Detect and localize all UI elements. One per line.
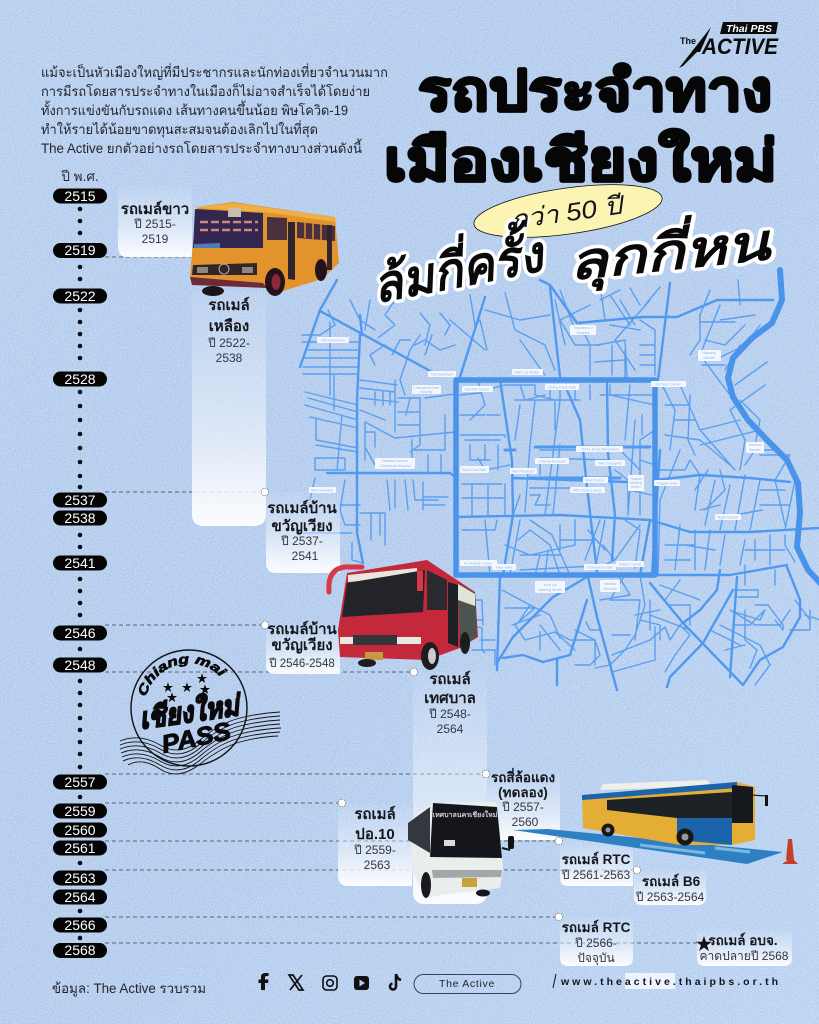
map: place labels: Wat Duangdee [598, 462, 622, 466]
timeline: 2538 [64, 510, 96, 526]
card: Por Or 10 bus: รถเมล์ [354, 805, 396, 823]
map: Ping river [728, 270, 819, 585]
card: Ban Khwan Wiang bus 2546: ปี 2546-2548 [268, 657, 335, 670]
card: experimental red songthaew [487, 767, 560, 840]
timeline: 2541 [64, 555, 96, 571]
card: Ban Khwan Wiang bus 2537: รถเมล์บ้าน [267, 499, 338, 517]
card: PAO bus: รถเมล์ อบจ. [708, 932, 778, 948]
map: place labels: Wat Suandok [311, 488, 333, 492]
map: place labels: Chiangmai Hospital [379, 464, 411, 468]
card: RTC bus 2566 [560, 917, 633, 966]
timeline: 2564 [64, 889, 96, 905]
icon: youtube [354, 976, 369, 990]
button: The Active: The Active [439, 978, 495, 990]
card: white bus: รถเมล์ขาว [121, 200, 189, 218]
map: place labels: Cultural Museum [538, 460, 566, 464]
intro paragraph: ทำให้รายได้น้อยขาดทุนสะสมจนต้องเลิกไปในที่สุด [41, 120, 318, 138]
intro paragraph: แม้จะเป็นหัวเมืองใหญ่ที่มีประชากรและนักท่องเที่ยวจำนวนมาก [41, 63, 388, 80]
timeline: 2528 [64, 371, 96, 387]
map: place labels: Wat Pantao [586, 478, 604, 482]
timeline: 2522 [64, 288, 96, 304]
map: place labels: Walking Street [538, 588, 562, 592]
timeline markers on dashes [261, 488, 641, 921]
icon: tiktok [390, 974, 401, 989]
stamp: Chiang Mai Pass [120, 649, 281, 774]
card: B6 bus [634, 870, 706, 905]
icon: X [289, 975, 303, 990]
callout text: over 50 years: กว่า 50 ปี [509, 191, 627, 235]
timeline: 2559 [64, 803, 96, 819]
timeline: 2546 [64, 625, 96, 641]
map: place labels: Hospital [420, 390, 433, 394]
card: municipal bus [413, 670, 487, 904]
timeline: 2557 [64, 774, 96, 790]
card: PAO bus [697, 930, 792, 966]
card: yellow bus [192, 290, 266, 526]
stamp: Chiang Mai Pass: ★ [166, 692, 178, 704]
timeline: 2560 [64, 822, 96, 838]
card: white bus: ปี 2515- [134, 217, 176, 231]
map: place labels: Kamsaenkam [431, 372, 453, 376]
map: place labels: Thapanpol 2 [573, 326, 593, 330]
icon: star marker: ★ [696, 935, 712, 954]
card: yellow bus: 2538 [216, 351, 243, 365]
map: place labels: Walking [630, 481, 642, 485]
card: Por Or 10 bus: 2563 [364, 858, 391, 872]
map: place labels: Market [750, 448, 760, 452]
card: Ban Khwan Wiang bus 2546: รถเมล์บ้าน [267, 620, 338, 638]
timeline [53, 169, 107, 958]
stamp: Chiang Mai Pass: PASS [159, 717, 234, 759]
map: place labels: Three Kings Monument [581, 448, 619, 452]
card: RTC bus 2566: ปี 2566- [575, 936, 617, 950]
year label: ปี พ.ศ. [61, 169, 99, 184]
map: place labels: Chiangmai Ram [413, 386, 439, 390]
card: Por Or 10 bus: ปอ.10 [355, 826, 395, 843]
card: municipal bus: 2564 [437, 722, 464, 736]
timeline: 2537 [64, 492, 96, 508]
map: place labels: Market [704, 356, 714, 360]
intro paragraph: การมีรถโดยสารประจำทางในเมืองก็ไม่อาจสำเร็จได้โดยง่าย [41, 82, 370, 99]
card: experimental red songthaew: 2560 [512, 815, 539, 829]
intro paragraph: ทั้งการแข่งขันกับรถแดง เส้นทางคนขึ้นน้อย พิษโควิด-19 [41, 100, 348, 118]
map: place labels: Hua Rin Corner [465, 388, 490, 392]
map: place labels: Warorot [749, 443, 761, 447]
logo: Thai PBS The Active: ACTIVE [701, 34, 779, 59]
icon: instagram [323, 976, 337, 990]
stamp: Chiang Mai Pass: เชียงใหม่ [137, 688, 244, 736]
icon: facebook [258, 973, 268, 990]
card: Ban Khwan Wiang bus 2546 [266, 620, 340, 674]
card: experimental red songthaew: ปี 2557- [502, 800, 544, 814]
map: place labels: Wat Lok Molee [515, 370, 539, 374]
timeline: 2515 [64, 188, 96, 204]
card: yellow bus: เหลือง [209, 318, 249, 335]
timeline: 2561 [64, 840, 96, 856]
title: เมืองเชียงใหม่ [384, 128, 777, 192]
source note: ข้อมูล: The Active รวบรวม [52, 981, 206, 997]
map: major roads [300, 280, 819, 575]
card: Ban Khwan Wiang bus 2537: 2541 [292, 549, 319, 563]
stamp: Chiang Mai Pass: ★ [196, 673, 208, 685]
map: minor roads [300, 300, 455, 563]
logo: Thai PBS The Active: The [680, 36, 696, 46]
title [384, 59, 777, 192]
timeline connector dashes [105, 257, 700, 943]
card: Ban Khwan Wiang bus 2546: ขวัญเวียง [271, 637, 333, 654]
callout: over 50 years ellipse [471, 175, 665, 247]
map: place labels [309, 325, 764, 593]
map: place labels: Nimmanhemin [321, 338, 345, 342]
map: place labels: Street [631, 485, 641, 489]
card: PAO bus: คาดปลายปี 2568 [700, 949, 789, 963]
map: ring road around the old city [456, 380, 655, 575]
map: place labels: Wua Lai [543, 583, 557, 587]
title: รถประจำทาง [418, 59, 772, 122]
card: municipal bus: ปี 2548- [429, 707, 471, 721]
map: place labels: Wat Chedi Luang [573, 488, 601, 492]
card: yellow bus: ปี 2522- [208, 336, 250, 350]
timeline: 2548 [64, 657, 96, 673]
map: Chiang Mai road network [300, 270, 819, 690]
card: B6 bus: รถเมล์ B6 [642, 873, 701, 889]
card: RTC bus 2561 [560, 841, 633, 886]
card: Ban Khwan Wiang bus 2537: ขวัญเวียง [271, 518, 333, 535]
card: Por Or 10 bus: ปี 2559- [354, 843, 396, 857]
card: B6 bus: ปี 2563-2564 [635, 890, 704, 904]
map: place labels: Katam Corner [619, 562, 642, 566]
timeline: 2563 [64, 870, 96, 886]
timeline: 2566 [64, 917, 96, 933]
map: place labels: Si Phum Corner [655, 382, 682, 386]
stamp: Chiang Mai Pass: ★ [182, 682, 192, 694]
map: place labels: Hospital [604, 587, 617, 591]
card: experimental red songthaew: (ทดลอง) [498, 785, 548, 800]
timeline: 2568 [64, 942, 96, 958]
logo: Thai PBS The Active: Thai PBS [726, 23, 772, 35]
card: municipal bus: เทศบาล [424, 690, 476, 707]
card: RTC bus 2566: ปัจจุบัน [577, 951, 615, 966]
intro paragraph [41, 63, 388, 156]
stamp: Chiang Mai Pass: ★ [200, 684, 210, 696]
stamp: Chiang Mai Pass: Chiang mai [138, 656, 228, 696]
map: place labels: Suan Dok Gate [462, 468, 486, 472]
map: place labels: Thapae Gate [657, 482, 677, 486]
button: The Active [414, 974, 521, 994]
map: place labels: Maharaj Nakorn [382, 459, 408, 463]
map: place labels: Ku Huang Corner [464, 562, 493, 566]
handwritten subtitle: ลุกกี่หน [564, 206, 775, 294]
website url: www.theactive.thaipbs.or.th [560, 976, 778, 988]
timeline: 2519 [64, 242, 96, 258]
card: Ban Khwan Wiang bus 2537: ปี 2537- [281, 534, 323, 548]
map: place labels: Chiangmai Gate [587, 566, 613, 570]
map: place labels: Hospital [577, 331, 590, 335]
icon: white municipal minibus: เทศบาลนครเชียงใหม่ [433, 810, 498, 819]
card: experimental red songthaew: รถสี่ล้อแดง [491, 767, 555, 785]
card: Por Or 10 bus [338, 803, 412, 886]
card: RTC bus 2561: รถเมล์ RTC [562, 851, 631, 867]
map: place labels: Medfast [604, 582, 616, 586]
card: municipal bus: รถเมล์ [429, 670, 471, 688]
card: white bus: 2519 [142, 232, 169, 246]
stamp: Chiang Mai Pass: ★ [162, 682, 174, 694]
map: place labels: Thapae [630, 477, 642, 481]
icon: red Ban Khwan Wiang minibus [329, 560, 478, 670]
handwritten subtitle [366, 206, 775, 314]
intro paragraph: The Active ยกตัวอย่างรถโดยสารประจำทางบางส่วนดังนี้ [41, 138, 363, 156]
card: RTC bus 2566: รถเมล์ RTC [562, 919, 631, 935]
footer [52, 973, 778, 997]
map: place labels: Nawarat [702, 351, 716, 355]
card: RTC bus 2561: ปี 2561-2563 [561, 868, 630, 882]
card: yellow bus: รถเมล์ [208, 296, 250, 314]
logo: Thai PBS The Active [679, 22, 779, 68]
icon: orange white-route bus [190, 202, 339, 296]
card: Ban Khwan Wiang bus 2537 [266, 492, 340, 573]
map: place labels: Night Bazaar [718, 516, 739, 520]
card: white bus [118, 186, 192, 257]
icon: blue and yellow RTC bus on road with cone [513, 780, 798, 864]
map: place labels: Hiya Gate [496, 566, 512, 570]
map: place labels: Wat Phasingh [512, 470, 534, 474]
map: place labels: Chang Puak Gate [548, 386, 576, 390]
stamp waves [120, 712, 281, 774]
handwritten subtitle: ล้มกี่ครั้ง [366, 217, 550, 314]
icon: white municipal minibus [408, 802, 514, 898]
